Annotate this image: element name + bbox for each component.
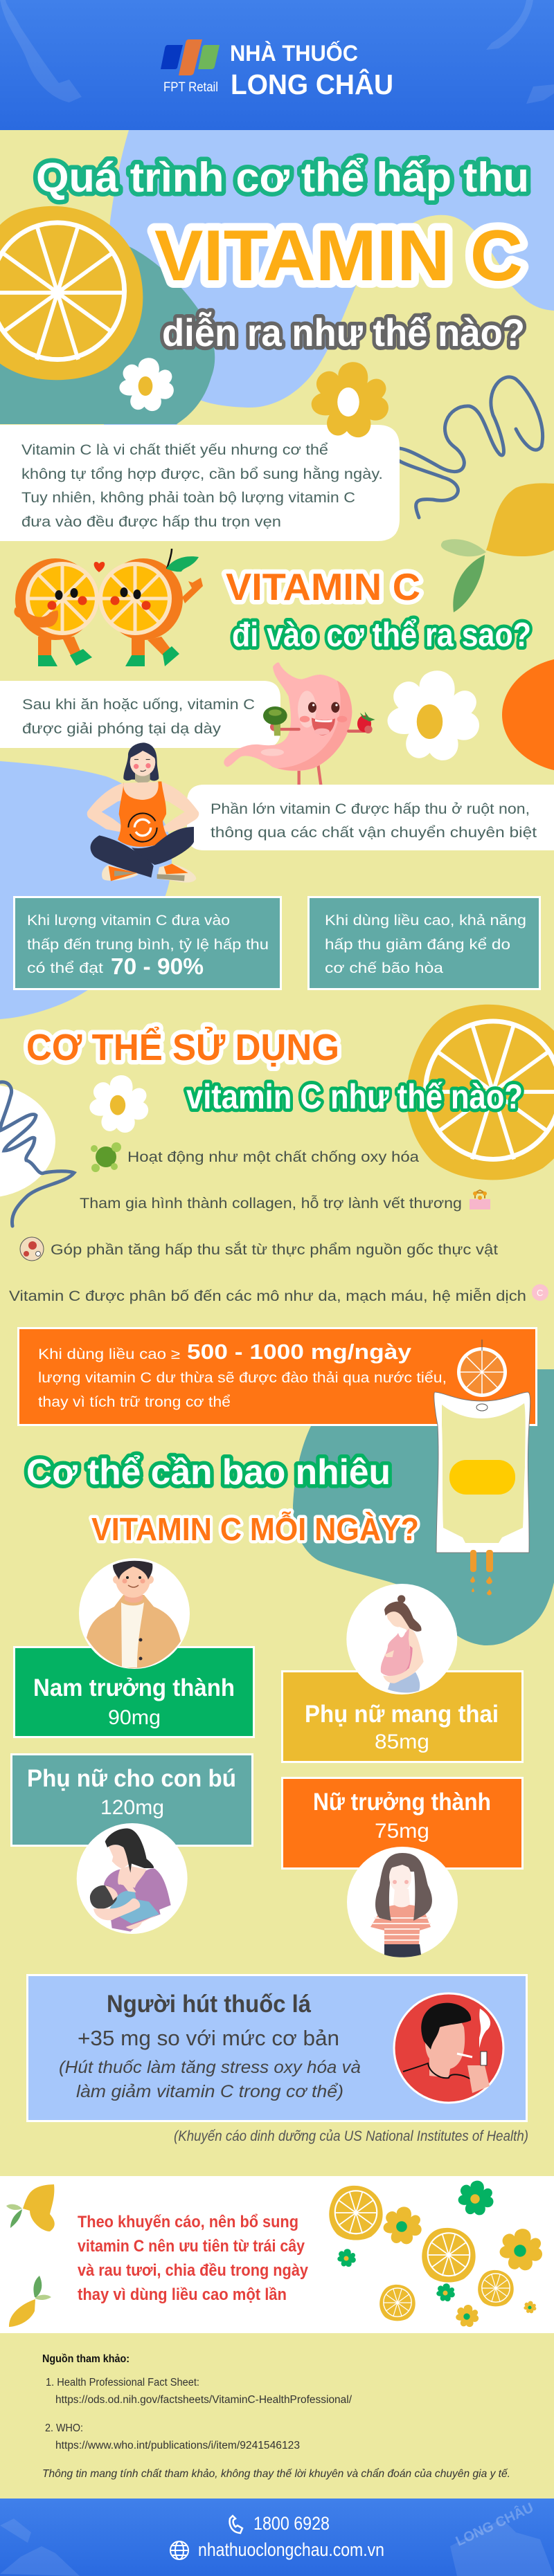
panel: small intestine text: thông qua các chất vận chuyển chuyên biệt: [211, 825, 537, 841]
callout: high dose: lượng vitamin C dư thừa sẽ được đào thải qua nước tiểu,: [38, 1370, 447, 1386]
heading: how the body uses vitamin c: [26, 1027, 523, 1116]
header banner: [0, 0, 554, 130]
references: Thông tin mang tính chất tham khảo, không thay thế lời khuyên và chẩn đoán của chuyên gia y tế.: [42, 2467, 510, 2480]
list: roles of vitamin c: [9, 1142, 548, 1304]
icon: antioxidant: [91, 1142, 121, 1172]
panel: smokers: làm giảm vitamin C trong cơ thể): [76, 2082, 343, 2101]
blue blob: [0, 761, 172, 1019]
illustration: man: [79, 1558, 190, 1669]
callout: absorption rate: [14, 897, 281, 989]
icon: phone: [230, 2516, 242, 2533]
references: 2. WHO:: [45, 2422, 83, 2434]
panel: intro text: không tự tổng hợp được, cần bổ sung hằng ngày.: [21, 466, 383, 482]
panel: recommendation: vitamin C nên ưu tiên từ trái cây: [78, 2237, 305, 2256]
icon: yellow flower: [312, 362, 388, 437]
callout: absorption rate: 70 - 90%: [111, 953, 204, 979]
heading: how much per day: Cơ thể cần bao nhiêu: [26, 1452, 391, 1492]
references: 1. Health Professional Fact Sheet:: [46, 2377, 199, 2388]
hero background shapes: [0, 130, 554, 425]
title: [36, 154, 529, 354]
panel: smokers: (Hút thuốc làm tăng stress oxy hóa và: [59, 2058, 361, 2077]
illustration: breastfeeding mother: [77, 1823, 188, 1934]
icon: large white flower: [388, 670, 479, 760]
title: Quá trình cơ thể hấp thu: [36, 154, 529, 201]
callout: saturation: hấp thu giảm đáng kể do: [325, 937, 510, 953]
orange semicircle: [502, 657, 554, 773]
icon: immune: C: [537, 1288, 543, 1298]
logo: FPT Retail Long Châu: LONG CHÂU: [231, 68, 393, 100]
illustration: woman pointing at belly: [87, 742, 199, 883]
callout: saturation: [309, 897, 540, 989]
decoration: lemons and flowers: [329, 2181, 542, 2327]
footer banner: LONG CHÂU: [453, 2499, 536, 2550]
callout: saturation: Khi dùng liều cao, khả năng: [325, 913, 526, 929]
panel: breastfeeding women: Phụ nữ cho con bú: [27, 1765, 236, 1792]
panel: breastfeeding women: [11, 1755, 252, 1934]
logo: FPT Retail Long Châu: [161, 39, 393, 100]
callout: absorption rate: Khi lượng vitamin C đưa vào: [27, 913, 230, 929]
footer banner: nhathuoclongchau.com.vn: [198, 2539, 384, 2560]
list: roles of vitamin c: Hoạt động như một chất chống oxy hóa: [127, 1149, 419, 1165]
lemon with leaves: [441, 483, 554, 612]
callout: absorption rate: thấp đến trung bình, tỷ lệ hấp thu: [27, 937, 269, 953]
panel: breastfeeding women: 120mg: [100, 1796, 164, 1819]
panel: smokers: +35 mg so với mức cơ bản: [78, 2026, 339, 2050]
references: Nguồn tham khảo:: [42, 2353, 129, 2365]
panel: intro text: Vitamin C là vi chất thiết yếu nhưng cơ thể: [21, 442, 328, 458]
panel: stomach text: [0, 681, 280, 748]
panel: stomach text: được giải phóng tại dạ dày: [22, 721, 222, 737]
callout: high dose: 500 - 1000 mg/ngày: [187, 1340, 412, 1364]
panel: recommendation: [0, 2176, 554, 2333]
list: roles of vitamin c: Tham gia hình thành collagen, hỗ trợ lành vết thương: [80, 1196, 462, 1212]
icon: iron cells: [20, 1237, 44, 1261]
references: https://www.who.int/publications/i/item/9241546123: [55, 2440, 300, 2451]
panel: adult women: 75mg: [375, 1820, 429, 1843]
white circle with squiggle: [0, 1082, 74, 1226]
panel: smokers: [28, 1975, 526, 2121]
panel: recommendation: và rau tươi, chia đều trong ngày: [78, 2261, 309, 2280]
panel: pregnant women: Phụ nữ mang thai: [305, 1701, 499, 1728]
callout: high dose: [18, 1328, 536, 1425]
decorative squiggle: [392, 377, 543, 518]
callout: absorption rate: có thể đạt: [27, 960, 103, 976]
panel: pregnant women: [283, 1584, 522, 1762]
panel: adult men: 90mg: [108, 1706, 161, 1729]
title: diễn ra như thế nào?: [162, 311, 525, 354]
footer banner: 1800 6928: [253, 2513, 330, 2534]
icon: immune: [532, 1284, 548, 1301]
panel: small intestine text: Phần lớn vitamin C được hấp thu ở ruột non,: [211, 801, 530, 817]
callout: saturation: cơ chế bão hòa: [325, 960, 443, 976]
callout: high dose: thay vì tích trữ trong cơ thể: [38, 1394, 231, 1410]
panel: adult men: Nam trưởng thành: [33, 1674, 235, 1701]
panel: recommendation: thay vì dùng liều cao một lần: [78, 2285, 287, 2304]
panel: small intestine text: [187, 785, 554, 850]
heading: how much per day: [26, 1452, 419, 1547]
panel: intro text: Tuy nhiên, không phải toàn bộ lượng vitamin C: [21, 490, 355, 506]
logo: FPT Retail Long Châu: FPT Retail: [163, 80, 218, 95]
lemon slice: section 2: [406, 1005, 554, 1180]
footer banner: [0, 2499, 554, 2576]
lemon slice: hero: [0, 206, 143, 380]
heading: how much per day: VITAMIN C MỖI NGÀY?: [91, 1511, 419, 1547]
illustration: stomach mascot: [224, 662, 375, 788]
panel: adult women: Nữ trưởng thành: [313, 1789, 491, 1816]
panel: stomach text: Sau khi ăn hoặc uống, vitamin C: [22, 697, 255, 713]
callout: high dose: Khi dùng liều cao ≥: [38, 1346, 180, 1362]
list: roles of vitamin c: Góp phần tăng hấp thu sắt từ thực phẩm nguồn gốc thực vật: [51, 1242, 498, 1258]
illustration: pregnant woman: [346, 1584, 457, 1695]
panel: intro text: [0, 425, 400, 541]
panel: smokers: Người hút thuốc lá: [107, 1991, 311, 2018]
references: https://ods.od.nih.gov/factsheets/VitaminC-HealthProfessional/: [55, 2394, 352, 2406]
panel: adult women: [283, 1778, 522, 1957]
panel: intro text: đưa vào đều được hấp thu trọn vẹn: [21, 514, 281, 530]
illustration: IV bag with orange slice: [434, 1340, 530, 1596]
illustration: orange mascots: [14, 549, 203, 666]
icon: lemons left: [6, 2184, 55, 2327]
panel: adult men: [14, 1558, 253, 1737]
list: roles of vitamin c: Vitamin C được phân bố đến các mô như da, mạch máu, hệ miễn dịch: [9, 1288, 526, 1304]
illustration: woman: [347, 1847, 458, 1957]
icon: white flower: [119, 358, 174, 411]
teal blob: [293, 1369, 554, 1645]
logo: FPT Retail Long Châu: NHÀ THUỐC: [230, 41, 358, 66]
illustration: smoker: [394, 1993, 503, 2103]
heading: vitamin c enters body: [226, 565, 531, 654]
panel: pregnant women: 85mg: [375, 1730, 429, 1753]
icon: collagen: [470, 1190, 490, 1209]
icon: white flower small: [89, 1075, 148, 1133]
title: VITAMIN C: [154, 216, 523, 296]
panel: recommendation: Theo khuyến cáo, nên bổ sung: [78, 2213, 298, 2231]
icon: globe: [170, 2541, 188, 2559]
heading: vitamin c enters body: VITAMIN C: [226, 565, 420, 608]
references: [42, 2353, 510, 2480]
heading: how the body uses vitamin c: CƠ THỂ SỬ DỤNG: [26, 1027, 339, 1068]
